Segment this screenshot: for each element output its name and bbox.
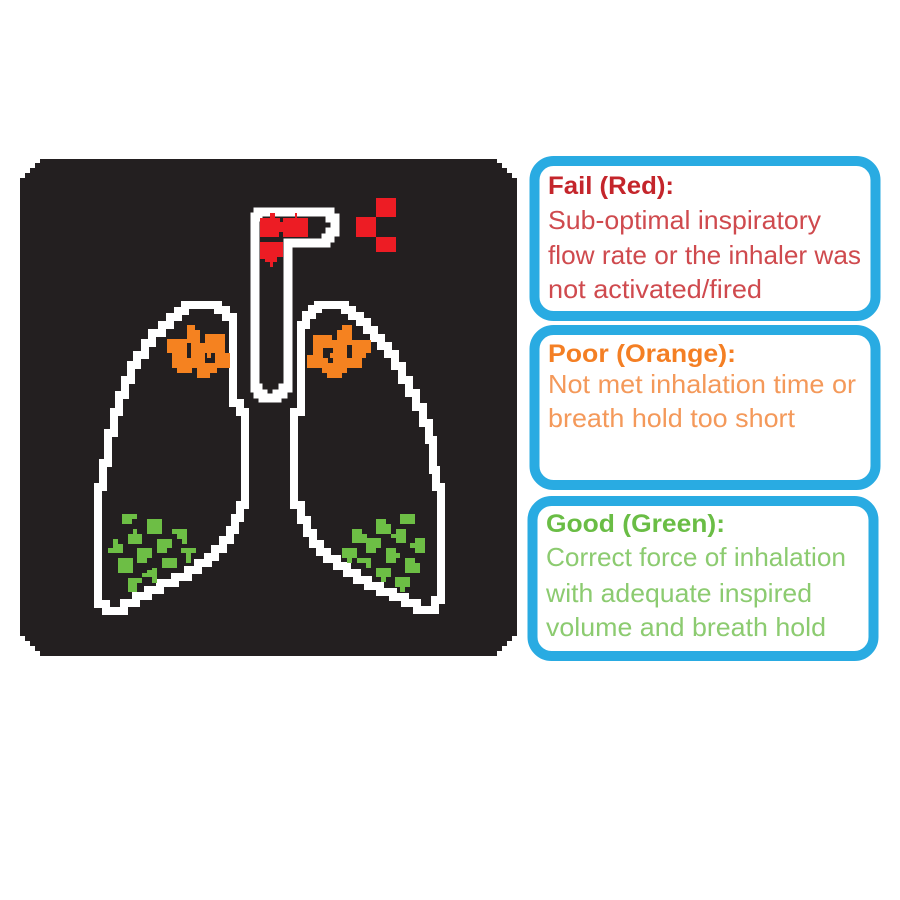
card frame: [532, 501, 874, 656]
orange particles in left lung: [167, 325, 230, 378]
heading: poor: Poor (Orange):: [548, 340, 736, 368]
red particles outside the mouth: [356, 198, 396, 252]
card: good: [528, 496, 878, 661]
card: fail: [530, 156, 880, 321]
description: good: [545, 542, 846, 642]
green particles in right lung: [342, 514, 425, 592]
heading: fail: Fail (Red):: [548, 172, 674, 200]
right lung outline: [294, 305, 441, 610]
green particles in left lung: [108, 514, 196, 592]
description: good: with adequate inspired: [545, 578, 812, 608]
card frame: [534, 161, 876, 316]
red particles in mouth and trachea: [260, 213, 308, 267]
description: fail: not activated/fired: [548, 274, 762, 304]
description: good: volume and breath hold: [546, 612, 826, 642]
left lung outline: [98, 305, 245, 611]
card frame: [534, 330, 876, 485]
description: fail: flow rate or the inhaler was: [548, 240, 861, 270]
panel: lung display: [20, 159, 517, 656]
description: poor: breath hold too short: [548, 403, 796, 433]
description: fail: Sub-optimal inspiratory: [548, 205, 821, 235]
description: fail: [548, 205, 861, 304]
orange particles in right lung: [307, 325, 371, 378]
display background: [20, 159, 517, 656]
card: poor: [530, 325, 880, 490]
description: good: Correct force of inhalation: [546, 542, 846, 572]
heading: good: Good (Green):: [546, 510, 725, 538]
description: poor: Not met inhalation time or: [548, 369, 856, 399]
mouth and trachea outline: [255, 212, 335, 398]
description: poor: [548, 369, 856, 433]
